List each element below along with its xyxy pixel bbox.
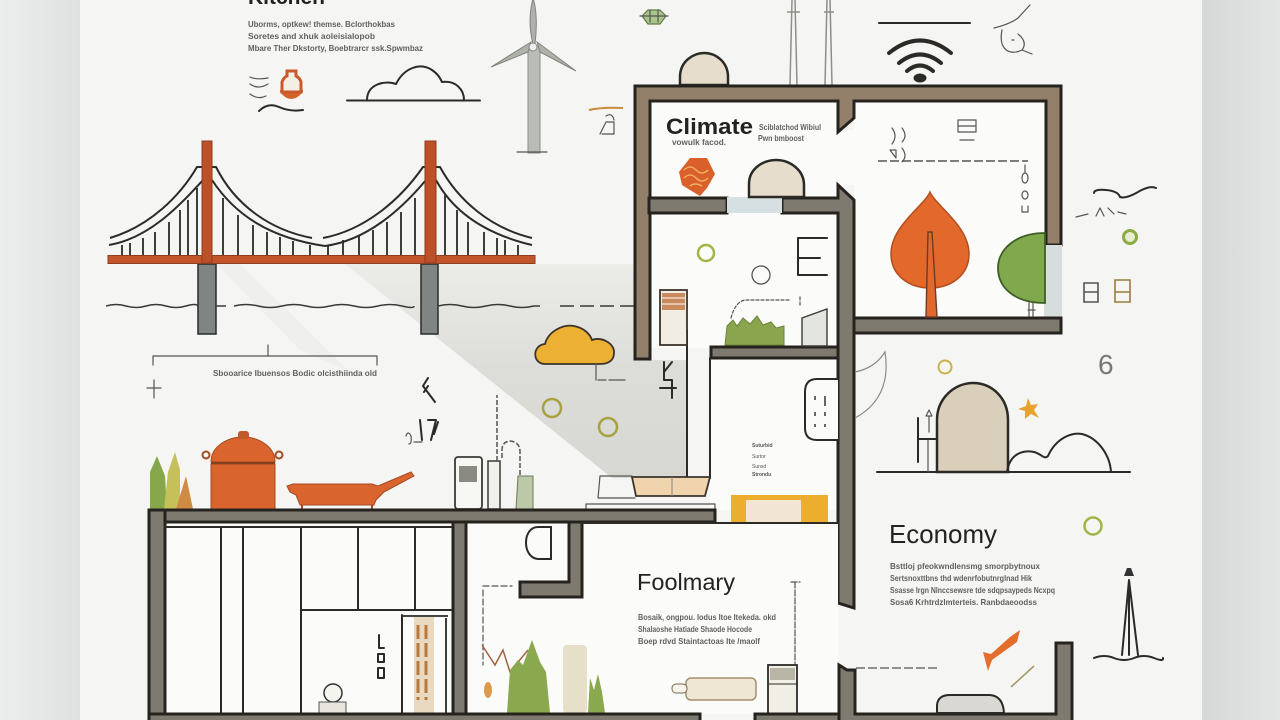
ring: green bbox=[698, 245, 714, 261]
ring: olive left bbox=[543, 399, 561, 417]
wall: top, left and right bbox=[635, 86, 1061, 359]
text block: economy description: Bsttloj pfeokwndlensmg smorpbytnoux bbox=[890, 561, 1040, 571]
icon: tray bbox=[632, 477, 710, 496]
panel: right room bbox=[878, 120, 1045, 317]
panel: middle room items bbox=[535, 238, 886, 522]
icon: sketched sofa bbox=[958, 120, 976, 140]
icon: small green emblem bbox=[640, 10, 668, 24]
dashed pole bbox=[791, 582, 800, 698]
caption text: Sbooarice Ibuensos Bodic olcisthiinda old bbox=[213, 368, 377, 378]
window: light glass bbox=[727, 197, 782, 213]
bridge towers bbox=[202, 141, 436, 263]
heading: Climate: Climate bbox=[666, 114, 753, 139]
icon: laptop sketch bbox=[586, 476, 715, 510]
icon: green bush bbox=[725, 316, 784, 345]
panel: kitchen counter objects bbox=[150, 395, 533, 509]
chart: suspension bridge bbox=[108, 141, 535, 334]
dome on roof bbox=[680, 53, 728, 85]
heading: Economy: Economy bbox=[889, 519, 997, 549]
icon: side cabinet bbox=[768, 665, 797, 714]
dashed lead line bbox=[483, 586, 512, 665]
wall: left bbox=[149, 510, 165, 720]
wall: climate room floor right bbox=[782, 185, 854, 608]
icon: orange pan bbox=[287, 472, 414, 509]
icon: orange leaf tree bbox=[891, 192, 969, 317]
icon: tube and faucet bbox=[488, 395, 520, 509]
text block: tiny notes: Sunsd bbox=[752, 464, 766, 470]
icon: cloud outline on horizon bbox=[347, 66, 480, 100]
dome in climate room bbox=[749, 160, 804, 197]
icon: cabinet bbox=[660, 290, 687, 345]
text block: economy description bbox=[890, 561, 1055, 607]
divider over wifi bbox=[879, 22, 970, 24]
text block: economy description: Sertsnoxttbns thd wdenrfobutnrglnad Hik bbox=[890, 573, 1032, 583]
icon: numeral six: 6 bbox=[1098, 349, 1114, 380]
thin partition bbox=[687, 330, 710, 478]
window: right glass bbox=[1044, 245, 1062, 317]
icon: green ring flower bbox=[1124, 230, 1136, 244]
text block: economy description: Ssasse Irgn Nlnccsewsre tde sdqpsaypeds Ncxpq bbox=[890, 585, 1055, 595]
wall: bottom middle bbox=[755, 714, 845, 720]
text block: economy description: Sosa6 Krhtrdzlmterteis. Ranbdaeoodss bbox=[890, 597, 1037, 607]
ring: green bbox=[1084, 518, 1102, 534]
ring: gold bbox=[938, 360, 952, 374]
wall: right room floor bbox=[854, 318, 1061, 333]
icon: orange sketch mark bbox=[589, 108, 623, 134]
text block: climate notes: Sciblatchod Wibiul bbox=[759, 122, 821, 132]
icon: tall plant bbox=[507, 640, 550, 713]
panel: spice shelf bbox=[402, 616, 448, 713]
icon: squiggle sketch top right bbox=[994, 5, 1032, 54]
icon: wall frame bbox=[798, 238, 827, 275]
panel: bracket caption bbox=[147, 345, 438, 444]
thin floor line bbox=[582, 522, 838, 524]
icon: orange pencil bbox=[983, 630, 1020, 671]
wall: bottom bbox=[149, 714, 700, 720]
dashed line bbox=[856, 667, 940, 669]
room interior bbox=[650, 101, 1046, 510]
icon: stone dome bbox=[937, 695, 1004, 713]
icon: yellow box bbox=[731, 495, 828, 522]
diagonal cast shadow bbox=[216, 264, 687, 478]
icon: glass panel bbox=[802, 309, 827, 346]
wall: climate room floor left bbox=[649, 198, 727, 213]
icon: small sketch by wall bbox=[660, 362, 676, 398]
cabinet grid bbox=[165, 527, 452, 713]
text block: kitchen description: Mbare Ther Dkstorty, Boebtrarcr ssk.Spwmbaz bbox=[248, 43, 423, 53]
text block: tiny notes: Strondu bbox=[752, 472, 771, 478]
panel: lower floor bbox=[149, 510, 845, 720]
icon: radio tower on water bbox=[1094, 568, 1163, 660]
dashed sketch over bush bbox=[731, 295, 800, 318]
text block: tiny notes: Suturbid bbox=[752, 443, 773, 449]
bridge cables bbox=[109, 167, 532, 246]
panel: kitchen heading and text bbox=[248, 0, 480, 111]
text block: climate notes bbox=[672, 122, 821, 147]
wall: L partition bbox=[520, 522, 582, 597]
icon: orange pot bbox=[202, 431, 282, 509]
icon: plants bbox=[150, 452, 193, 509]
text block: kitchen description bbox=[248, 19, 423, 53]
text block: foolmary description: Boep rdvd Staintactoas Ite /maolf bbox=[638, 636, 760, 646]
bridge piers bbox=[198, 264, 438, 334]
panel: economy bbox=[839, 360, 1163, 720]
icon: small pot and waves bbox=[250, 71, 303, 111]
icon: small orange seed bbox=[484, 682, 492, 698]
icon: chain sketch bbox=[378, 635, 384, 678]
text block: climate notes: vowulk facod. bbox=[672, 137, 726, 147]
icon: canister bbox=[455, 457, 482, 509]
icon: cream column bbox=[563, 645, 587, 713]
icon: small circle bbox=[752, 266, 770, 284]
icon: cream pan bbox=[672, 678, 756, 700]
text block: kitchen description: Soretes and xhuk aoleisialopob bbox=[248, 31, 375, 41]
text block: foolmary description: Bosaik, ongpou. Iodus Itoe Itekeda. okd bbox=[638, 612, 776, 622]
wall: inner shelf bbox=[711, 347, 838, 358]
text block: foolmary description bbox=[638, 612, 776, 646]
leaf outline beside wall bbox=[855, 352, 886, 418]
icon: cross mark bbox=[147, 380, 161, 398]
wall: lower right stub bbox=[839, 643, 1072, 720]
icon: half disc bbox=[526, 527, 551, 559]
panel: climate bbox=[666, 114, 821, 197]
icon: twin masts bbox=[787, 0, 834, 85]
icon: glass bbox=[516, 476, 533, 509]
icon: yellow cloud bbox=[535, 326, 625, 380]
icon: wave sketches right bbox=[1076, 187, 1156, 217]
icon: orange blob bbox=[679, 158, 715, 196]
heading: Foolmary: Foolmary bbox=[637, 569, 736, 595]
text block: climate notes: Pwn bmboost bbox=[758, 133, 804, 143]
icon: sketched glyphs bbox=[420, 378, 438, 440]
bracket bbox=[153, 345, 377, 365]
bridge deck bbox=[108, 256, 535, 264]
text block: tiny notes bbox=[752, 443, 773, 478]
panel: house upper walls bbox=[635, 53, 1062, 608]
text block: tiny notes: Surtor bbox=[752, 454, 766, 460]
wall: mid bbox=[453, 522, 466, 720]
icon: orange vine sketch bbox=[482, 645, 528, 672]
icon: dome and hills on horizon bbox=[877, 383, 1130, 472]
dashed line with chain bbox=[878, 161, 1028, 212]
icon: faint circle bbox=[406, 433, 422, 444]
text block: foolmary description: Shalaoshe Hatiade Shaode Hocode bbox=[638, 624, 752, 634]
icon: small wand bbox=[1011, 666, 1034, 687]
icon: two small frames bbox=[1084, 280, 1130, 302]
bridge hangers bbox=[122, 188, 518, 256]
icon: sketched sprouts bbox=[890, 128, 905, 162]
water line bbox=[106, 304, 634, 308]
icon: wifi signal bbox=[889, 40, 951, 82]
icon: orange star bbox=[1018, 398, 1039, 419]
ring: olive right bbox=[599, 418, 617, 436]
icon: green tree bbox=[998, 233, 1045, 316]
room interior bbox=[165, 522, 838, 714]
wall: counter top bbox=[149, 510, 715, 522]
icon: grass bbox=[588, 674, 605, 713]
icon: control panel bbox=[805, 379, 838, 440]
text block: kitchen description: Uborms, optkew! themse. Bclorthokbas bbox=[248, 19, 395, 29]
icon: wind turbine bbox=[491, 0, 576, 153]
icon: round dial bbox=[319, 684, 346, 713]
